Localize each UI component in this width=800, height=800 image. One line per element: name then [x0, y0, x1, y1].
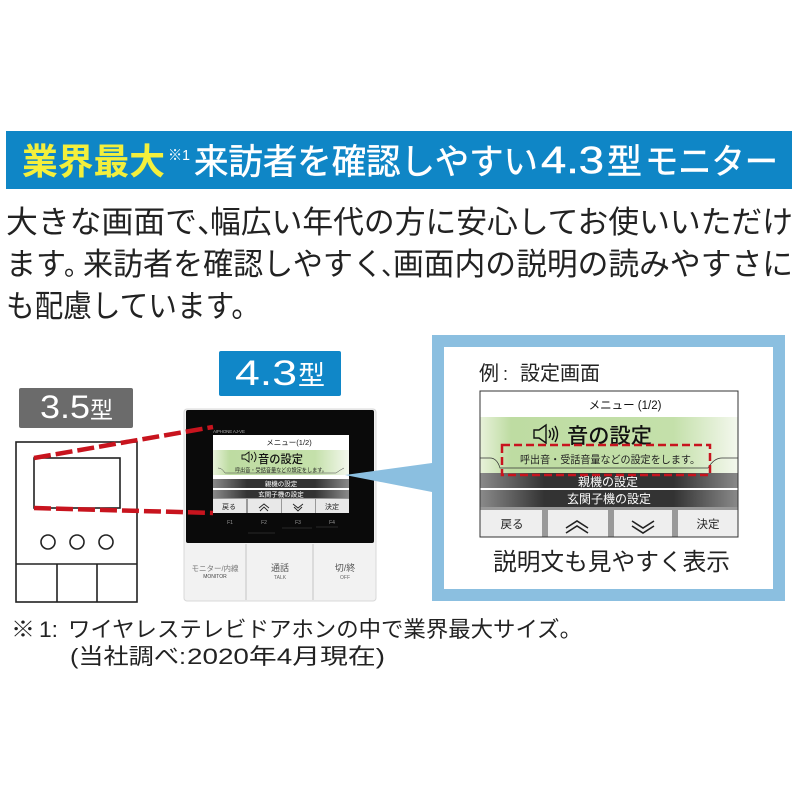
label: 4.3型: 型	[298, 361, 325, 391]
title text: 来訪者を確認しやすい	[194, 143, 538, 182]
intro paragraph: 大きな画面で	[6, 205, 197, 240]
label: 4.3型: 4.3	[235, 354, 297, 393]
device: 4.3 inch monitor: TALK	[274, 575, 287, 581]
footnote: 2020年4月現在)	[187, 644, 385, 669]
label: 4.3型	[219, 351, 341, 396]
blue callout wedge	[345, 463, 432, 492]
label: 3.5型: 型	[90, 397, 113, 423]
intro paragraph: ます	[6, 247, 66, 282]
device: 4.3 inch monitor: 切/終	[335, 562, 355, 573]
device: 4.3 inch monitor: 親機の設定	[265, 479, 298, 488]
enlarged screen	[480, 391, 738, 537]
enlarged screen: 決定	[696, 518, 720, 531]
footnote: ワイヤレステレビドアホンの中で業界最大サイズ。	[68, 617, 582, 642]
device: 4.3 inch monitor: F4	[329, 520, 335, 526]
device: 4.3 inch monitor: OFF	[340, 575, 350, 581]
footnote mark: ※1	[168, 147, 190, 164]
enlarged screen: 呼出音・受話音量などの設定をします。	[520, 453, 700, 466]
device: 4.3 inch monitor: F1	[227, 520, 233, 526]
enlarged screen: 親機の設定	[578, 475, 638, 489]
footnote: (当社調べ:	[70, 644, 186, 669]
enlarged screen: 玄関子機の設定	[567, 492, 651, 506]
device: 4.3 inch monitor: F3	[295, 520, 301, 526]
title text: モニター	[645, 143, 778, 182]
device: 4.3 inch monitor: 決定	[325, 502, 339, 511]
speaker icon	[534, 425, 558, 443]
device: 4.3 inch monitor: F2	[261, 520, 267, 526]
example caption: 説明文も見やすく表示	[493, 549, 730, 576]
enlarged screen: 戻る	[500, 519, 524, 531]
device: 4.3 inch monitor: メニュー(1/2)	[266, 438, 312, 447]
intro paragraph: 画面内の説明の読みやすさに	[393, 247, 793, 282]
title text: 型	[607, 143, 642, 182]
device: 4.3 inch monitor: 玄関子機の設定	[258, 490, 304, 498]
intro paragraph: も配慮しています。	[6, 289, 260, 324]
enlarged screen: 音の設定	[567, 425, 652, 448]
panel: screen example	[438, 341, 779, 595]
device: 4.3 inch monitor: 音の設定	[258, 452, 303, 466]
device: 4.3 inch monitor: MONITOR	[203, 574, 227, 580]
device: 4.3 inch monitor: 通話	[271, 563, 289, 573]
title text	[194, 140, 778, 182]
label: 3.5型	[19, 388, 133, 428]
red dashed zoom lines	[34, 427, 213, 513]
enlarged screen: メニュー (1/2)	[589, 400, 662, 412]
device: 4.3 inch monitor	[184, 409, 376, 601]
device: 4.3 inch monitor: AIPHONE AJ-VE	[213, 429, 245, 434]
red dashed highlight	[502, 445, 710, 475]
device: 4.3 inch monitor: 戻る	[222, 503, 236, 511]
intro paragraph: 幅広い年代の方に安心してお使いいただけ	[210, 205, 793, 240]
example heading: 設定画面	[520, 362, 600, 385]
title banner	[6, 131, 792, 189]
example heading	[479, 362, 600, 385]
label: 3.5型: 3.5	[40, 389, 90, 425]
example heading: 例	[479, 362, 499, 385]
intro paragraph	[6, 205, 793, 324]
footnote: 1:	[39, 617, 58, 642]
diagram: 3.5 inch monitor	[16, 442, 137, 602]
intro paragraph: 来訪者を確認しやすく	[83, 247, 383, 282]
intro paragraph: 。	[64, 251, 90, 281]
footnote: ※	[11, 617, 35, 642]
example heading: :	[503, 364, 508, 384]
device: 4.3 inch monitor: 呼出音・受話音量などの設定をします。	[235, 466, 327, 474]
title highlight: 業界最大	[22, 141, 165, 182]
footnote	[11, 617, 582, 669]
title text: 4.3	[541, 140, 604, 182]
device: 4.3 inch monitor: モニター/内線	[191, 563, 239, 573]
intro paragraph: 、	[381, 251, 407, 281]
intro paragraph: 、	[197, 205, 228, 240]
